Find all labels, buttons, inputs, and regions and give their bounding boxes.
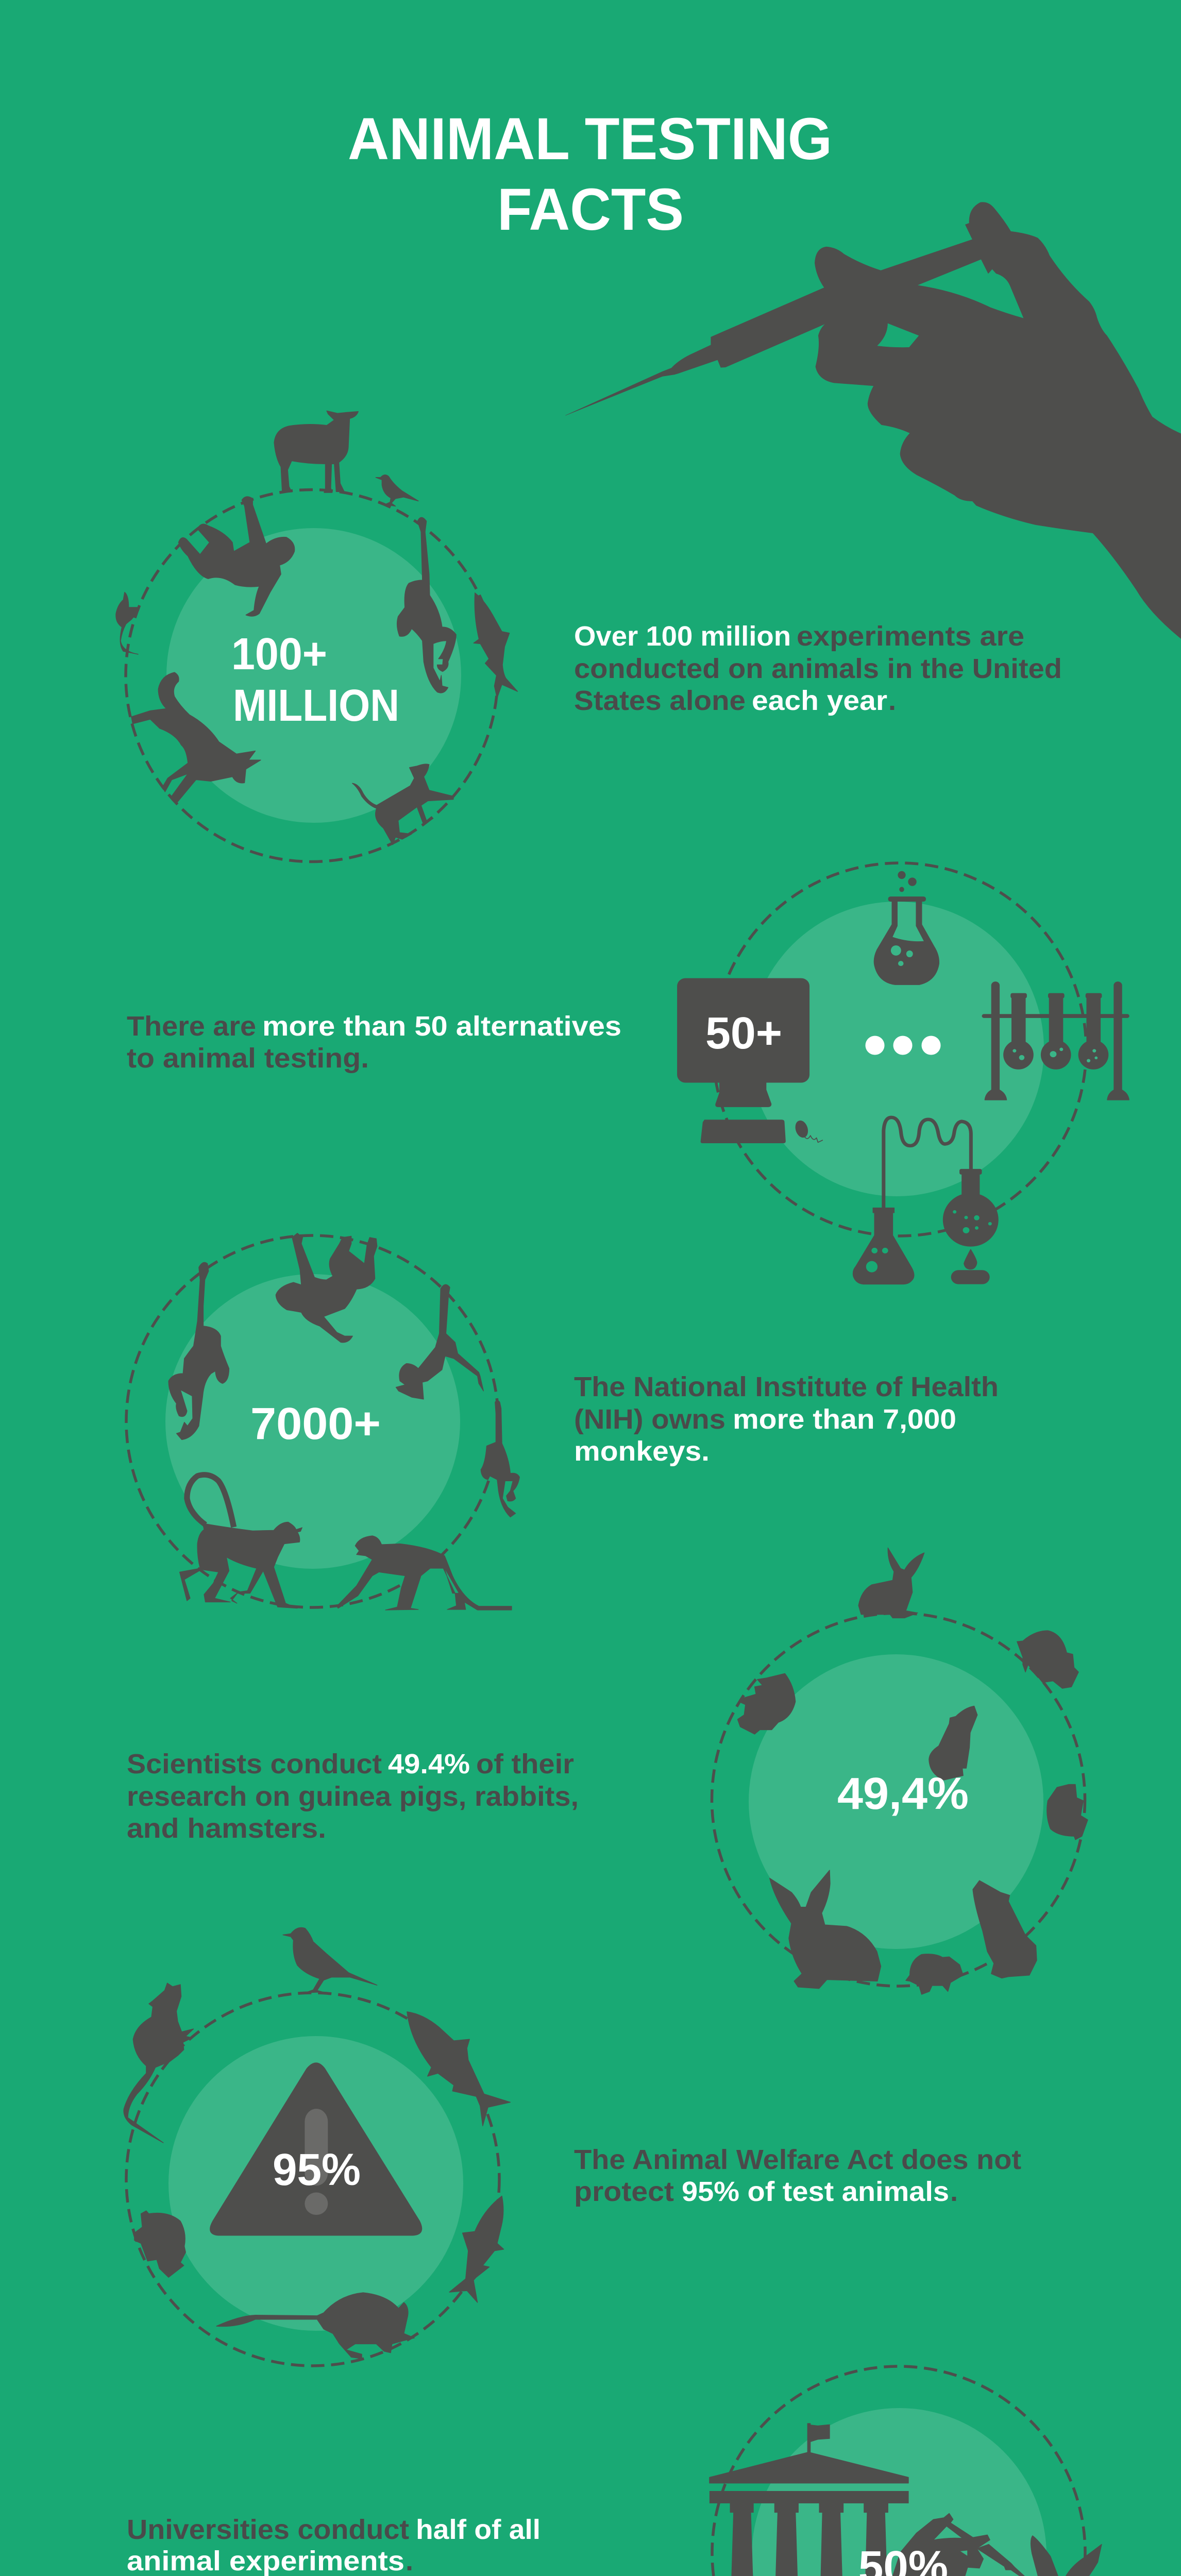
- icon: gloved hand holding syringe: [566, 202, 1181, 639]
- text block: 100 million experiments: conducted on animals in the United: [574, 653, 1062, 684]
- title: [348, 106, 832, 243]
- icon: university building: [710, 2423, 909, 2576]
- text block: 49.4 percent research: and hamsters.: [127, 1813, 326, 1844]
- dashed ring: [712, 1613, 1085, 1986]
- lab equipment: [677, 871, 1129, 1284]
- inner circle: [166, 528, 461, 823]
- title: ANIMAL TESTING: [348, 106, 832, 172]
- text block: 100 million experiments: each year: [752, 685, 887, 716]
- number: 49,4%: 49,4%: [837, 1769, 969, 1819]
- text block: Animal Welfare Act: [574, 2144, 1021, 2207]
- text block: universities: .: [406, 2546, 413, 2576]
- text block: Animal Welfare Act: .: [950, 2176, 958, 2207]
- icon: warning triangle: [210, 2063, 422, 2235]
- text block: universities: animal experiments: [127, 2546, 404, 2576]
- inner circle: [168, 2036, 463, 2331]
- text block: NIH monkeys: monkeys.: [574, 1436, 710, 1467]
- text block: 100 million experiments: Over 100 million: [574, 621, 791, 652]
- number: 100+ million: MILLION: [233, 681, 399, 731]
- number: 100+ million: 100+: [231, 629, 327, 679]
- number: 50+: 50+: [705, 1008, 782, 1058]
- inner circle: [752, 2408, 1047, 2576]
- dashed ring: [126, 489, 498, 861]
- panel: 50+ alternatives: [677, 863, 1129, 1284]
- number: 7000+: 7000+: [250, 1399, 381, 1449]
- text block: 49.4 percent research: of their: [476, 1749, 574, 1780]
- text block: 49.4 percent research: [127, 1749, 579, 1844]
- panel: 100+ million: [116, 411, 517, 861]
- animals around the ring: [116, 411, 517, 845]
- icon: computer: [677, 978, 823, 1143]
- icon: rabbit: [973, 2536, 1102, 2576]
- text block: 50 alternatives: to animal testing.: [127, 1043, 369, 1074]
- dashed ring: [712, 2366, 1085, 2576]
- text block: 49.4 percent research: research on guinea pigs, rabbits,: [127, 1781, 579, 1812]
- text block: 100 million experiments: experiments are: [797, 621, 1024, 652]
- icon: three dots: [866, 1036, 941, 1055]
- panel: 7000+ monkeys: [126, 1233, 519, 1610]
- icon: distillation apparatus: [853, 1117, 999, 1284]
- text block: 50 alternatives: [127, 1011, 621, 1074]
- text block: 100 million experiments: .: [888, 685, 896, 716]
- text block: 100 million experiments: States alone: [574, 685, 746, 716]
- text block: universities: Universities conduct: [127, 2514, 409, 2545]
- text block: universities: [127, 2514, 541, 2576]
- text block: NIH monkeys: [574, 1371, 999, 1467]
- text block: Animal Welfare Act: The Animal Welfare Act does not: [574, 2144, 1021, 2175]
- text block: 50 alternatives: more than 50 alternatives: [262, 1011, 621, 1042]
- number: 95%: 95%: [273, 2145, 361, 2195]
- university, hand and rabbit: [710, 2423, 1102, 2576]
- text block: 100 million experiments: [574, 621, 1062, 716]
- number: 100+ million: [231, 629, 399, 731]
- text block: Animal Welfare Act: 95% of test animals: [682, 2176, 949, 2207]
- text block: NIH monkeys: (NIH) owns: [574, 1404, 726, 1435]
- dashed ring: [713, 863, 1086, 1236]
- dashed ring: [126, 1993, 499, 2366]
- panel: 49,4% rodents and rabbits: [712, 1548, 1088, 1994]
- text block: 49.4 percent research: Scientists conduct: [127, 1749, 382, 1780]
- monkeys: [168, 1233, 519, 1610]
- icon: bubbling flask: [874, 871, 939, 985]
- text block: Animal Welfare Act: protect: [574, 2176, 674, 2207]
- text block: 50 alternatives: There are: [127, 1011, 256, 1042]
- dashed ring: [126, 1235, 498, 1607]
- animals and warning sign: [124, 1927, 510, 2359]
- title: FACTS: [497, 177, 684, 243]
- rabbits and guinea pigs: [737, 1548, 1088, 1994]
- text block: 49.4 percent research: 49.4%: [388, 1749, 470, 1780]
- text block: universities: half of all: [416, 2514, 541, 2545]
- inner circle: [749, 1654, 1043, 1949]
- text block: NIH monkeys: The National Institute of Health: [574, 1371, 999, 1402]
- inner circle: [165, 1274, 460, 1569]
- text block: NIH monkeys: more than 7,000: [733, 1404, 956, 1435]
- icon: test tube rack: [982, 981, 1129, 1100]
- panel: 50% universities: [710, 2366, 1102, 2576]
- panel: 95% warning: [124, 1927, 510, 2366]
- icon: hand with syringe: [885, 2513, 1040, 2576]
- inner circle: [749, 902, 1044, 1196]
